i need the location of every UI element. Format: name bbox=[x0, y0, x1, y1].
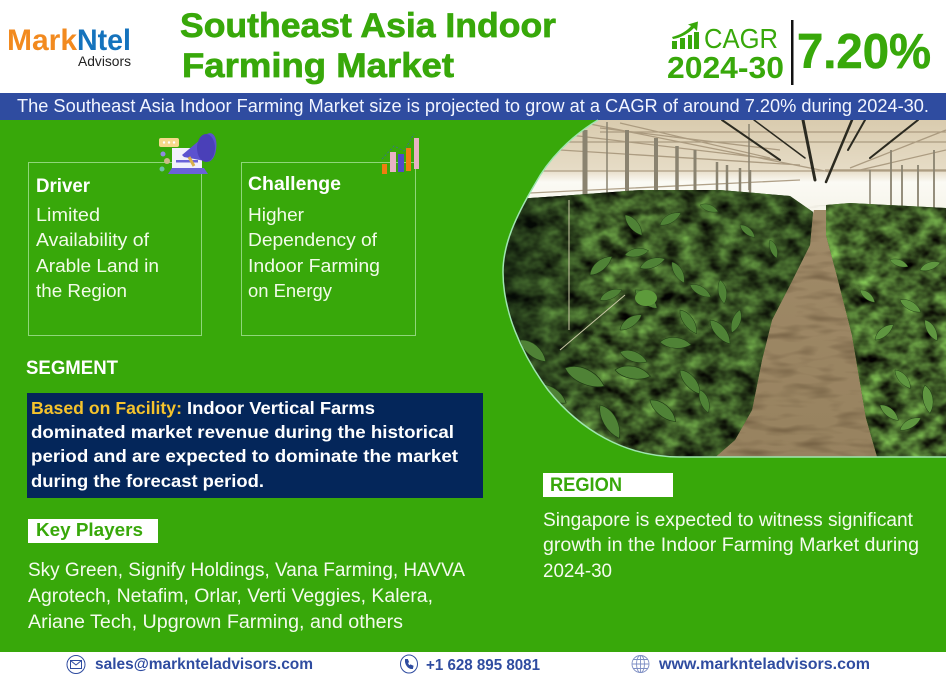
dark roof beams bbox=[722, 120, 918, 182]
panel: driver bbox=[28, 162, 202, 336]
text: region description bbox=[543, 510, 919, 582]
logo: MarkNtel Advisors bbox=[7, 24, 131, 69]
CAGR block: CAGR bbox=[704, 23, 778, 54]
panel: challenge: Dependency of bbox=[248, 229, 378, 250]
panel: driver: Driver bbox=[36, 176, 91, 197]
icon: bar chart bbox=[382, 134, 419, 174]
icon: megaphone bbox=[159, 133, 217, 174]
text: region description: 2024-30 bbox=[543, 561, 612, 582]
title: Southeast Asia Indoor bbox=[180, 7, 556, 45]
text: key players list bbox=[28, 560, 465, 633]
footer contact bar: sales@marknteladvisors.com bbox=[95, 656, 313, 673]
CAGR block bbox=[667, 20, 931, 85]
CAGR block: 7.20% bbox=[797, 25, 931, 79]
panel: driver: Availability of bbox=[36, 229, 150, 250]
heading: region: REGION bbox=[550, 475, 622, 496]
text: region description: Singapore is expected to witness significant bbox=[543, 510, 914, 531]
greenhouse posts bbox=[585, 122, 934, 210]
footer contact bar: www.marknteladvisors.com bbox=[658, 656, 870, 673]
panel: driver: the Region bbox=[36, 280, 127, 301]
panel: challenge: Higher bbox=[248, 204, 304, 225]
callout: segment facility bbox=[27, 393, 483, 498]
left foliage bbox=[500, 185, 820, 460]
callout: segment facility: dominated market revenue during the historical bbox=[31, 422, 454, 442]
CAGR block: 2024-30 bbox=[667, 50, 784, 85]
greenhouse photo bbox=[500, 120, 946, 460]
heading: region bbox=[543, 473, 673, 497]
title bbox=[180, 7, 556, 85]
callout: segment facility: Based on Facility: bbox=[31, 398, 182, 418]
text: key players list: Ariane Tech, Upgrown Farming, and others bbox=[28, 612, 403, 633]
logo: MarkNtel Advisors: Advisors bbox=[78, 53, 131, 69]
heading: key players: Key Players bbox=[36, 519, 143, 540]
icon: phone bbox=[400, 655, 418, 673]
callout: segment facility: during the forecast period. bbox=[31, 471, 264, 491]
footer contact bar: +1 628 895 8081 bbox=[426, 657, 540, 674]
right foliage bbox=[820, 200, 946, 460]
text: key players list: Sky Green, Signify Holdings, Vana Farming, HAVVA bbox=[28, 560, 465, 581]
summary banner: The Southeast Asia Indoor Farming Market size is projected to grow at a CAGR of around 7.20% during 2024-30. bbox=[17, 96, 929, 116]
panel: challenge: on Energy bbox=[248, 280, 333, 301]
icon: email bbox=[67, 656, 85, 674]
text: region description: growth in the Indoor Farming Market during bbox=[543, 535, 919, 556]
callout: segment facility: Indoor Vertical Farms bbox=[187, 398, 375, 418]
text: key players list: Agrotech, Netafim, Orlar, Verti Veggies, Kalera, bbox=[28, 586, 433, 607]
panel: challenge: Indoor Farming bbox=[248, 255, 380, 276]
icon: growth bars with arrow bbox=[672, 22, 699, 49]
title: Farming Market bbox=[182, 47, 454, 85]
panel: driver: Limited bbox=[36, 204, 100, 225]
panel: driver: Arable Land in bbox=[36, 255, 159, 276]
photo outline bbox=[503, 120, 946, 457]
footer contact bar bbox=[0, 652, 946, 674]
icon: globe bbox=[632, 656, 649, 672]
logo: MarkNtel Advisors: Mark bbox=[7, 24, 77, 57]
panel: challenge: Challenge bbox=[248, 173, 341, 195]
callout: segment facility: period and are expected to dominate the market bbox=[31, 446, 458, 466]
panel: challenge bbox=[242, 162, 416, 336]
heading: segment: SEGMENT bbox=[26, 358, 118, 379]
soil path bbox=[710, 210, 878, 460]
green main panel bbox=[0, 120, 946, 652]
logo: MarkNtel Advisors: Ntel bbox=[77, 24, 131, 57]
